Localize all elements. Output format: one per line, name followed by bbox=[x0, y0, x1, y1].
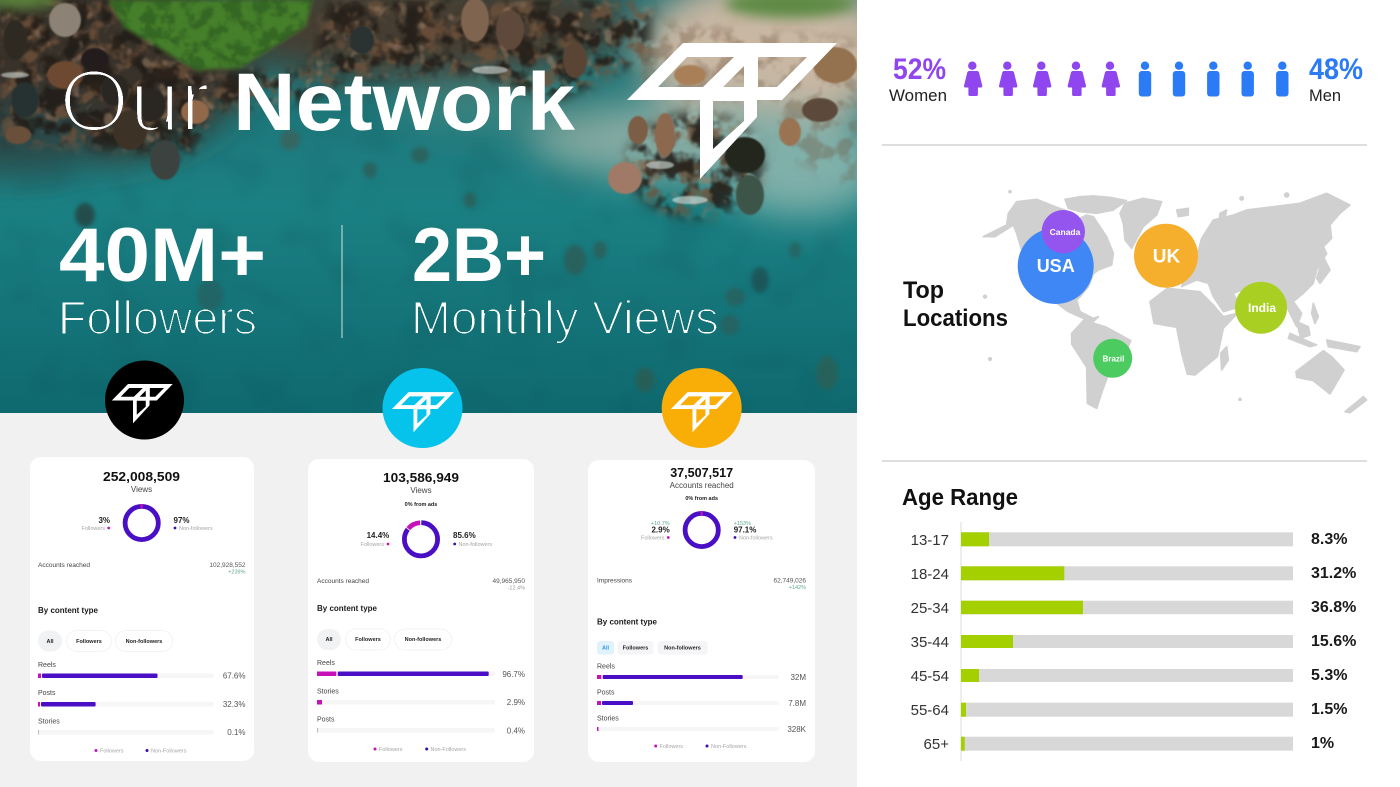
hero aerial coast photo bbox=[0, 0, 900, 413]
followers share bbox=[360, 531, 389, 548]
impressions row: +142% bbox=[789, 585, 806, 591]
panel: account card 1 bbox=[30, 457, 254, 761]
legend: Followers bbox=[100, 748, 124, 754]
content bars: 0.1% bbox=[227, 728, 246, 737]
panel: account card 3: 0% from ads bbox=[685, 496, 718, 502]
legend bbox=[94, 748, 187, 754]
non-followers share: 97% bbox=[174, 516, 190, 525]
accounts reached row: Accounts reached bbox=[317, 578, 369, 585]
lower left background bbox=[0, 413, 857, 787]
impressions row: 62,749,026 bbox=[773, 578, 806, 584]
stat: monthly views bbox=[411, 213, 719, 344]
content bars: 0.4% bbox=[507, 726, 525, 736]
bar: 35-44: 35-44 bbox=[911, 634, 949, 651]
filter pills: Non-followers bbox=[126, 639, 162, 645]
filter pills: All bbox=[325, 637, 333, 643]
filter pills: All bbox=[46, 639, 54, 645]
content bars: 67.6% bbox=[223, 672, 246, 680]
followers share: 14.4% bbox=[367, 531, 389, 540]
donut chart bbox=[124, 505, 159, 541]
bubble: India: India bbox=[1248, 301, 1276, 315]
content bars: Posts bbox=[317, 716, 335, 724]
title: Our Network: Network bbox=[233, 57, 575, 148]
non-followers share: +153% bbox=[734, 521, 751, 527]
content bars: Reels bbox=[317, 660, 335, 667]
content bars: Stories bbox=[317, 688, 339, 696]
bar: 18-24: 31.2% bbox=[1311, 565, 1356, 582]
accounts reached row: +239% bbox=[228, 570, 246, 576]
bar: 45-54 bbox=[911, 667, 1347, 685]
world map bbox=[983, 191, 1367, 413]
content bars: 32.3% bbox=[223, 700, 246, 709]
followers share: +10.7% bbox=[651, 521, 670, 527]
men percentage: Men bbox=[1309, 86, 1341, 105]
content bars: Posts bbox=[597, 690, 615, 696]
views total: 252,008,509 bbox=[103, 469, 180, 484]
panel: account card 2: 0% from ads bbox=[405, 502, 437, 508]
content bars: Stories bbox=[597, 716, 619, 722]
followers share bbox=[641, 521, 670, 542]
bubble: Brazil bbox=[1093, 339, 1132, 378]
title: Our Network: Our bbox=[59, 51, 210, 150]
accounts reached total: 37,507,517 bbox=[670, 465, 733, 480]
bubble: India bbox=[1235, 282, 1287, 334]
heading: top locations bbox=[903, 277, 1008, 332]
bar: 25-34: 25-34 bbox=[911, 600, 949, 617]
bar: 65+ bbox=[924, 735, 1334, 753]
non-followers share: Non-followers bbox=[458, 542, 492, 548]
bar: 35-44 bbox=[911, 633, 1356, 651]
content bars: 96.7% bbox=[502, 670, 525, 679]
bar: 18-24: 18-24 bbox=[911, 566, 949, 583]
filter pills bbox=[317, 629, 452, 650]
stat divider bbox=[342, 225, 343, 338]
accounts reached row: 102,928,552 bbox=[209, 562, 246, 569]
icons: five women figures bbox=[964, 61, 1120, 96]
bubble: USA: USA bbox=[1037, 256, 1075, 276]
bar: 55-64 bbox=[911, 701, 1347, 719]
bar: 35-44: 15.6% bbox=[1311, 633, 1356, 650]
women percentage bbox=[889, 53, 947, 105]
bar: 25-34: 36.8% bbox=[1311, 599, 1356, 616]
legend: Followers bbox=[379, 747, 403, 753]
panel: account card 3 bbox=[588, 460, 815, 762]
followers share bbox=[81, 516, 110, 532]
non-followers share bbox=[453, 531, 492, 548]
heading: top locations: Locations bbox=[903, 305, 1008, 332]
stat: followers: Followers bbox=[58, 291, 257, 344]
legend: Non-Followers bbox=[151, 748, 187, 754]
bubble: USA bbox=[1018, 228, 1094, 304]
donut chart bbox=[684, 512, 719, 548]
non-followers share bbox=[174, 516, 213, 532]
content bars bbox=[317, 660, 525, 736]
icon: black brand badge bbox=[105, 360, 184, 440]
women percentage: Women bbox=[889, 86, 947, 105]
content bars: Posts bbox=[38, 690, 56, 697]
bubble: Canada: Canada bbox=[1050, 227, 1081, 237]
filter pills: Followers bbox=[623, 646, 648, 652]
icon: cyan brand badge bbox=[382, 368, 462, 448]
accounts reached row bbox=[317, 578, 525, 592]
legend bbox=[654, 744, 747, 750]
non-followers share bbox=[734, 521, 773, 542]
followers share: Followers bbox=[641, 536, 665, 542]
heading: age range: Age Range bbox=[902, 484, 1018, 510]
bar: 13-17 bbox=[911, 531, 1347, 549]
followers share: Followers bbox=[360, 542, 384, 548]
heading: top locations: Top bbox=[903, 277, 944, 304]
accounts reached row: Accounts reached bbox=[38, 562, 90, 569]
stat: followers: 40M+ bbox=[59, 213, 266, 298]
followers share: Followers bbox=[81, 526, 105, 532]
panel: account card 1: Views bbox=[131, 485, 152, 494]
bar: 55-64: 55-64 bbox=[911, 702, 949, 719]
icon: large brand logo bbox=[627, 43, 837, 179]
stat: monthly views: Monthly Views bbox=[411, 291, 719, 344]
content bars: 2.9% bbox=[507, 698, 525, 707]
bar: 55-64: 1.5% bbox=[1311, 701, 1347, 718]
content bars: Stories bbox=[38, 718, 60, 726]
content bars: Reels bbox=[38, 662, 56, 669]
stat: monthly views: 2B+ bbox=[412, 213, 546, 298]
filter pills bbox=[597, 641, 708, 654]
section heading: By content type bbox=[317, 604, 378, 613]
content bars: 7.8M bbox=[788, 699, 806, 708]
non-followers share: 97.1% bbox=[734, 526, 756, 534]
panel: account card 2: Views bbox=[410, 486, 432, 495]
content bars bbox=[38, 662, 246, 737]
icon: amber brand badge bbox=[662, 368, 742, 448]
content bars: Reels bbox=[597, 664, 615, 670]
filter pills: Non-followers bbox=[664, 646, 701, 652]
icons: five men figures bbox=[1139, 61, 1288, 96]
filter pills bbox=[38, 630, 172, 652]
content bars bbox=[597, 664, 807, 734]
views total: 103,586,949 bbox=[383, 470, 459, 485]
bar: 13-17: 8.3% bbox=[1311, 531, 1347, 548]
filter pills: Followers bbox=[76, 639, 102, 645]
men percentage: 48% bbox=[1309, 53, 1363, 86]
title: Our Network bbox=[59, 51, 575, 150]
filter pills: Followers bbox=[355, 637, 381, 643]
bubble: UK: UK bbox=[1153, 246, 1180, 268]
legend: Non-Followers bbox=[711, 744, 747, 750]
donut chart bbox=[398, 516, 444, 563]
accounts reached row bbox=[38, 562, 246, 576]
bubble: UK bbox=[1134, 224, 1198, 288]
bar: 45-54: 5.3% bbox=[1311, 667, 1347, 684]
legend: Followers bbox=[660, 744, 683, 750]
bar: 25-34 bbox=[911, 599, 1356, 617]
bar: 13-17: 13-17 bbox=[911, 532, 949, 549]
non-followers share: Non-followers bbox=[739, 536, 773, 542]
men percentage bbox=[1309, 53, 1363, 105]
bubble: Brazil: Brazil bbox=[1103, 354, 1124, 364]
bar: 45-54: 45-54 bbox=[911, 668, 949, 685]
bubble: Canada bbox=[1042, 210, 1085, 253]
accounts reached row: 49,965,950 bbox=[492, 578, 525, 585]
bar: 18-24 bbox=[911, 565, 1356, 583]
bar: 65+: 65+ bbox=[924, 736, 949, 753]
filter pills: All bbox=[602, 646, 609, 652]
women percentage: 52% bbox=[893, 53, 946, 86]
followers share: 3% bbox=[98, 516, 110, 525]
legend bbox=[374, 747, 466, 753]
panel: account card 3: Accounts reached bbox=[670, 481, 734, 490]
filter pills: Non-followers bbox=[405, 637, 441, 643]
stat: followers bbox=[58, 213, 266, 344]
legend: Non-Followers bbox=[430, 747, 466, 753]
impressions row: Impressions bbox=[597, 578, 633, 584]
impressions row bbox=[597, 578, 806, 591]
content bars: 32M bbox=[790, 673, 806, 682]
panel: account card 2 bbox=[308, 459, 534, 762]
non-followers share: Non-followers bbox=[179, 526, 213, 532]
accounts reached row: -12.4% bbox=[508, 586, 525, 592]
section heading: By content type bbox=[38, 606, 99, 615]
followers share: 2.9% bbox=[651, 526, 670, 534]
section heading: By content type bbox=[597, 618, 658, 626]
bar chart: age range bbox=[911, 522, 1356, 761]
content bars: 328K bbox=[787, 725, 807, 734]
bar: 65+: 1% bbox=[1311, 735, 1334, 752]
non-followers share: 85.6% bbox=[453, 531, 476, 540]
